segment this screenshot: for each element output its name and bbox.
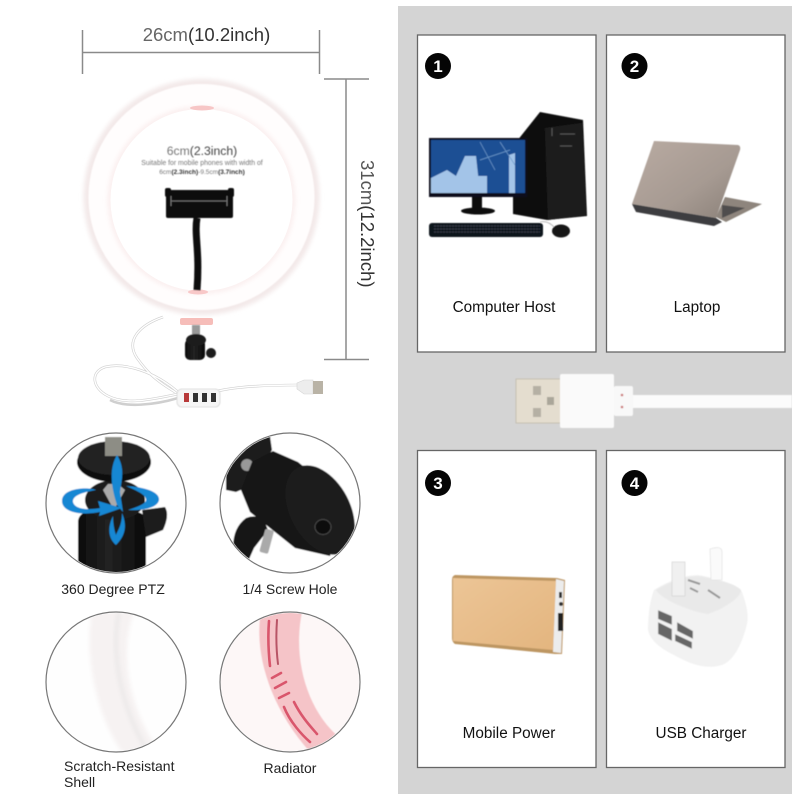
label: scratch-resistant shell: Shell bbox=[64, 774, 95, 790]
badge 4: 4 bbox=[630, 474, 640, 493]
ball head mount bbox=[185, 325, 216, 360]
badge 4 bbox=[622, 470, 648, 496]
detail: radiator bbox=[220, 612, 360, 752]
ring light bbox=[84, 79, 320, 325]
size caption: Suitable for mobile phones with width of bbox=[141, 160, 263, 167]
badge 2: 2 bbox=[630, 57, 639, 76]
charger illustration bbox=[648, 548, 748, 667]
label: USB Charger bbox=[656, 725, 746, 742]
card 4: USB charger bbox=[606, 450, 785, 768]
phone holder bbox=[165, 188, 234, 290]
power bank illustration bbox=[452, 575, 565, 654]
label: 360 Degree PTZ: 360 Degree PTZ bbox=[61, 581, 165, 597]
width dimension: 26cm: 26cm(10.2inch) bbox=[143, 24, 270, 45]
label: Mobile Power bbox=[463, 725, 555, 742]
size caption: 6cm(2.3inch) bbox=[167, 144, 237, 158]
pink clip top bbox=[190, 106, 214, 110]
laptop illustration bbox=[632, 141, 762, 226]
card 3: mobile power bbox=[418, 450, 596, 768]
label: radiator: Radiator bbox=[264, 760, 317, 776]
width dimension: 26cm bbox=[82, 24, 320, 74]
size caption bbox=[141, 144, 263, 176]
USB cable plug bbox=[516, 374, 792, 428]
badge 2 bbox=[622, 53, 648, 79]
detail: 1/4 screw hole bbox=[220, 433, 369, 573]
badge 1: 1 bbox=[433, 57, 443, 76]
badge 3 bbox=[425, 470, 451, 496]
label: scratch-resistant shell: Scratch-Resistant bbox=[64, 758, 175, 774]
grey connection panel bbox=[398, 6, 792, 794]
blue rotation arrows bbox=[62, 488, 122, 516]
badge 1 bbox=[425, 53, 451, 79]
label: 1/4 screw hole: 1/4 Screw Hole bbox=[243, 581, 338, 597]
size caption: 6cm(2.3inch)-9.5cm(3.7inch) bbox=[159, 169, 245, 176]
label: Laptop bbox=[674, 299, 720, 316]
height dimension: 31cm: 31cm (12.2inch) bbox=[357, 160, 378, 288]
card 1: computer host bbox=[418, 35, 596, 352]
label: Computer Host bbox=[453, 299, 556, 316]
detail: scratch-resistant shell bbox=[46, 612, 186, 752]
computer illustration bbox=[429, 112, 587, 238]
card 2: laptop bbox=[606, 35, 785, 352]
detail: 360 degree PTZ bbox=[46, 433, 186, 574]
badge 3: 3 bbox=[433, 474, 443, 493]
height dimension: 31cm bbox=[324, 79, 378, 360]
power cable with switch and USB plug bbox=[95, 317, 323, 407]
